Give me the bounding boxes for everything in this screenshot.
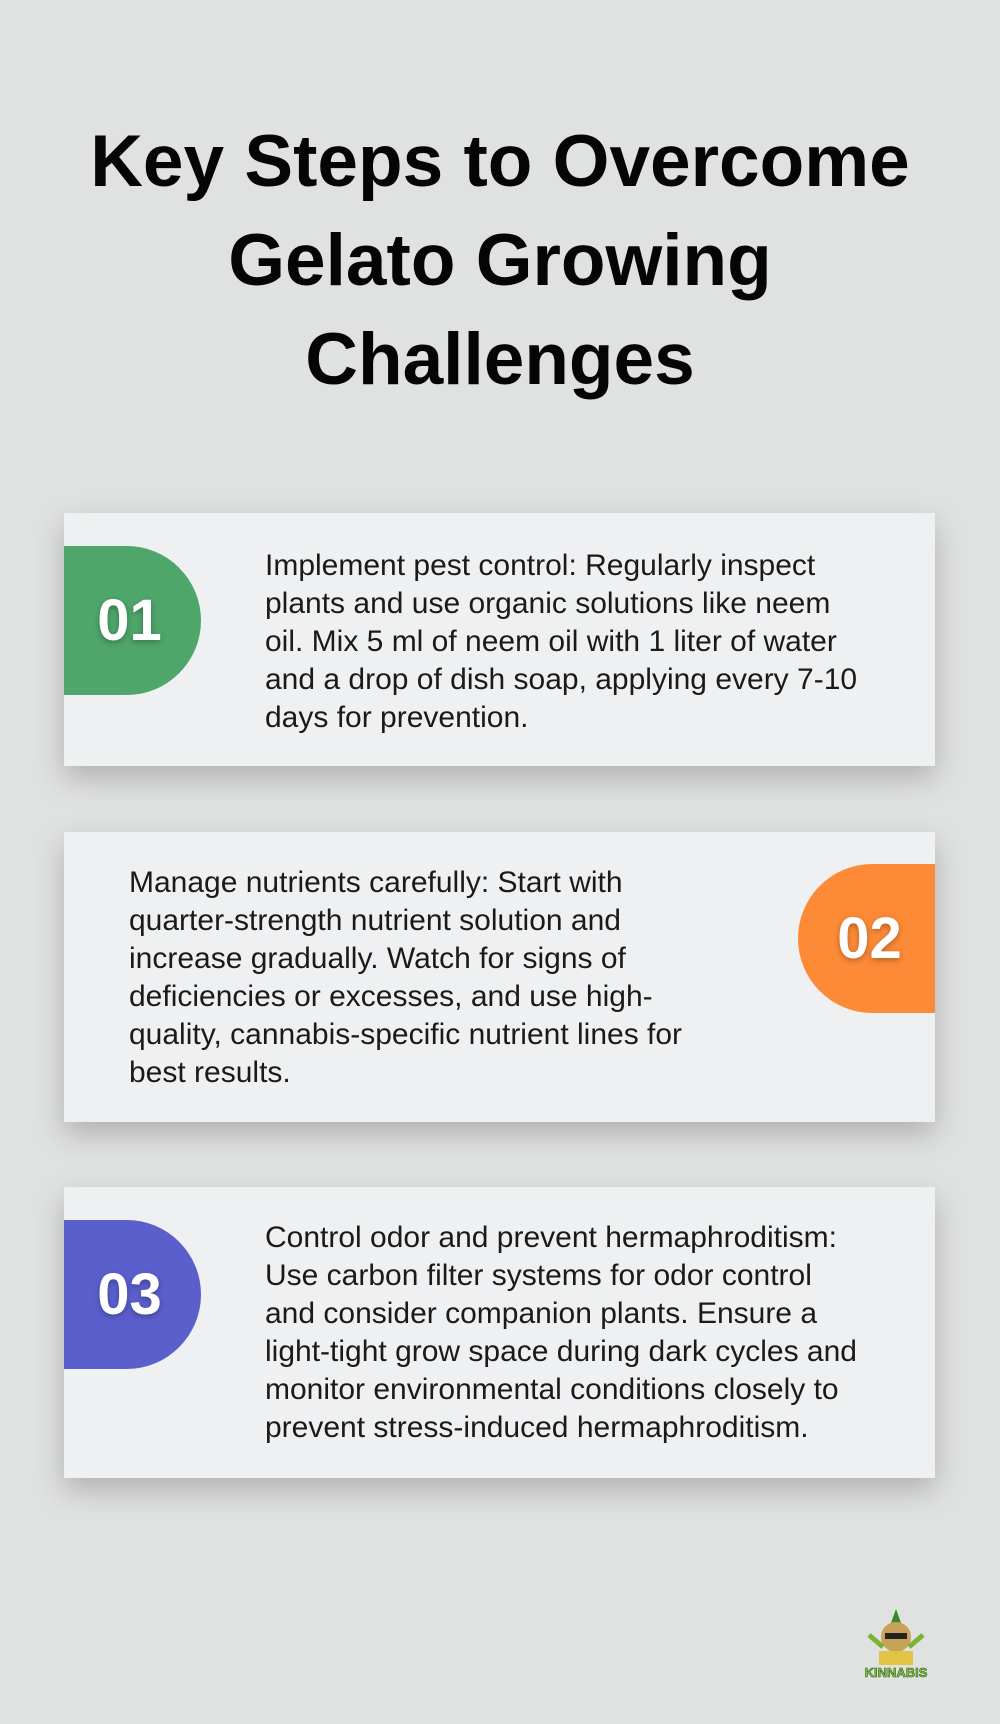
text 03: [265, 1221, 857, 1444]
text 03: prevent stress-induced hermaphroditism.: [265, 1411, 809, 1444]
text 01: plants and use organic solutions like neem: [265, 587, 830, 620]
logo: KINNABIS: [865, 1665, 928, 1680]
title: Key Steps to Overcome: [90, 121, 910, 202]
badge 01: 01: [97, 588, 162, 653]
badge 03: [64, 1220, 201, 1369]
text 02: quality, cannabis-specific nutrient lines for: [129, 1018, 682, 1051]
text 03: and consider companion plants. Ensure a: [265, 1297, 817, 1330]
logo: [865, 1609, 928, 1680]
title: [90, 121, 910, 400]
text 03: light-tight grow space during dark cycles and: [265, 1335, 857, 1368]
text 01: days for prevention.: [265, 701, 528, 734]
title: Challenges: [305, 319, 695, 400]
panel: step 02: [64, 832, 935, 1122]
text 02: increase gradually. Watch for signs of: [129, 942, 626, 975]
text 02: Manage nutrients carefully: Start with: [129, 866, 623, 899]
badge 02: [798, 864, 935, 1013]
badge 01: [64, 546, 201, 695]
text 01: [265, 549, 857, 734]
text 01: Implement pest control: Regularly inspect: [265, 549, 815, 582]
text 03: Control odor and prevent hermaphroditism:: [265, 1221, 837, 1254]
text 03: Use carbon filter systems for odor control: [265, 1259, 812, 1292]
panel: step 01: [64, 513, 935, 766]
panel: step 03: [64, 1187, 935, 1478]
text 02: deficiencies or excesses, and use high-: [129, 980, 653, 1013]
title: Gelato Growing: [228, 220, 772, 301]
text 03: monitor environmental conditions closely to: [265, 1373, 839, 1406]
text 02: [129, 866, 682, 1089]
text 01: oil. Mix 5 ml of neem oil with 1 liter of water: [265, 625, 837, 658]
badge 02: 02: [837, 906, 902, 971]
badge 03: 03: [97, 1262, 162, 1327]
text 01: and a drop of dish soap, applying every 7-10: [265, 663, 857, 696]
text 02: best results.: [129, 1056, 291, 1089]
text 02: quarter-strength nutrient solution and: [129, 904, 621, 937]
